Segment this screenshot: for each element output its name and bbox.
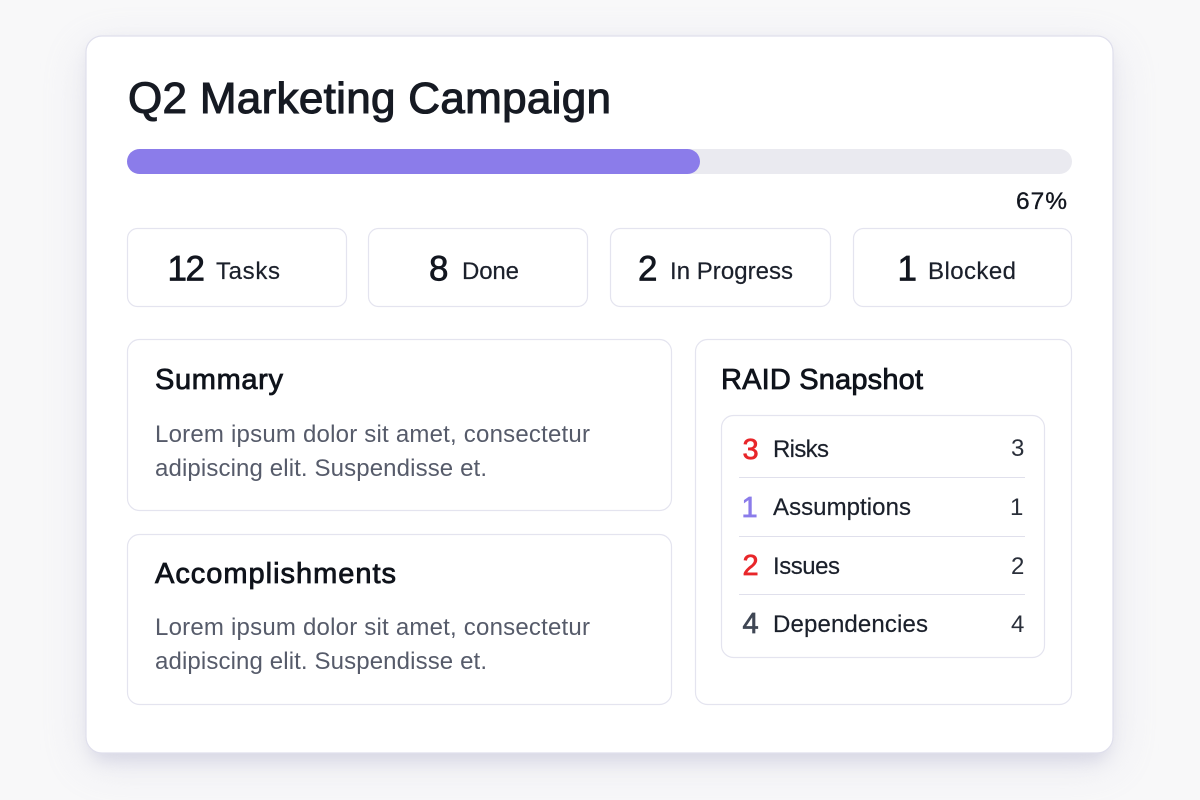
stat: tasks: Tasks (216, 258, 280, 285)
row: issues: 2 (1011, 553, 1024, 580)
row: assumptions (742, 492, 1023, 524)
stat: blocked: 1 (898, 250, 917, 288)
panel: accomplishments (128, 534, 672, 704)
row: risks: Risks (773, 436, 829, 463)
row: assumptions: 1 (1010, 494, 1023, 521)
row: dependencies: 4 (742, 608, 759, 640)
progress percentage: 67% (1016, 188, 1067, 215)
row: risks (742, 434, 1024, 466)
raid list (722, 416, 1044, 658)
row: risks: 3 (742, 434, 759, 466)
row: dependencies: 4 (1011, 611, 1024, 638)
row: issues: 2 (742, 550, 759, 582)
stat: done (368, 228, 588, 306)
heading: summary: Summary (155, 364, 284, 396)
accomplishments text: adipiscing elit. Suspendisse et. (155, 648, 487, 675)
accomplishments text (155, 614, 590, 675)
row: issues (742, 550, 1024, 582)
title: Q2 Marketing Campaign (128, 74, 611, 123)
row: risks: 3 (1011, 435, 1024, 462)
row: assumptions: Assumptions (773, 494, 911, 521)
stat: in progress: 2 (638, 250, 657, 288)
stat: blocked: Blocked (928, 258, 1016, 285)
stat: tasks (128, 228, 346, 306)
row: dependencies (742, 608, 1024, 640)
stat: in progress (610, 228, 830, 306)
panel: main card (84, 36, 1115, 765)
stat: done: Done (462, 258, 519, 285)
row: dependencies: Dependencies (773, 611, 928, 638)
summary text (155, 421, 590, 482)
stat: done: 8 (429, 250, 448, 288)
heading: accomplishments: Accomplishments (155, 558, 396, 590)
summary text: adipiscing elit. Suspendisse et. (155, 455, 487, 482)
accomplishments text: Lorem ipsum dolor sit amet, consectetur (155, 614, 590, 641)
row: assumptions: 1 (742, 492, 758, 524)
stat: tasks: 12 (168, 250, 205, 288)
progress bar (127, 149, 1072, 174)
heading: raid snapshot: RAID Snapshot (721, 364, 923, 396)
panel: summary (128, 340, 672, 510)
panel: raid snapshot (696, 340, 1072, 704)
row: issues: Issues (773, 553, 840, 580)
summary text: Lorem ipsum dolor sit amet, consectetur (155, 421, 590, 448)
stat: blocked (854, 228, 1072, 306)
stat: in progress: In Progress (670, 258, 793, 285)
